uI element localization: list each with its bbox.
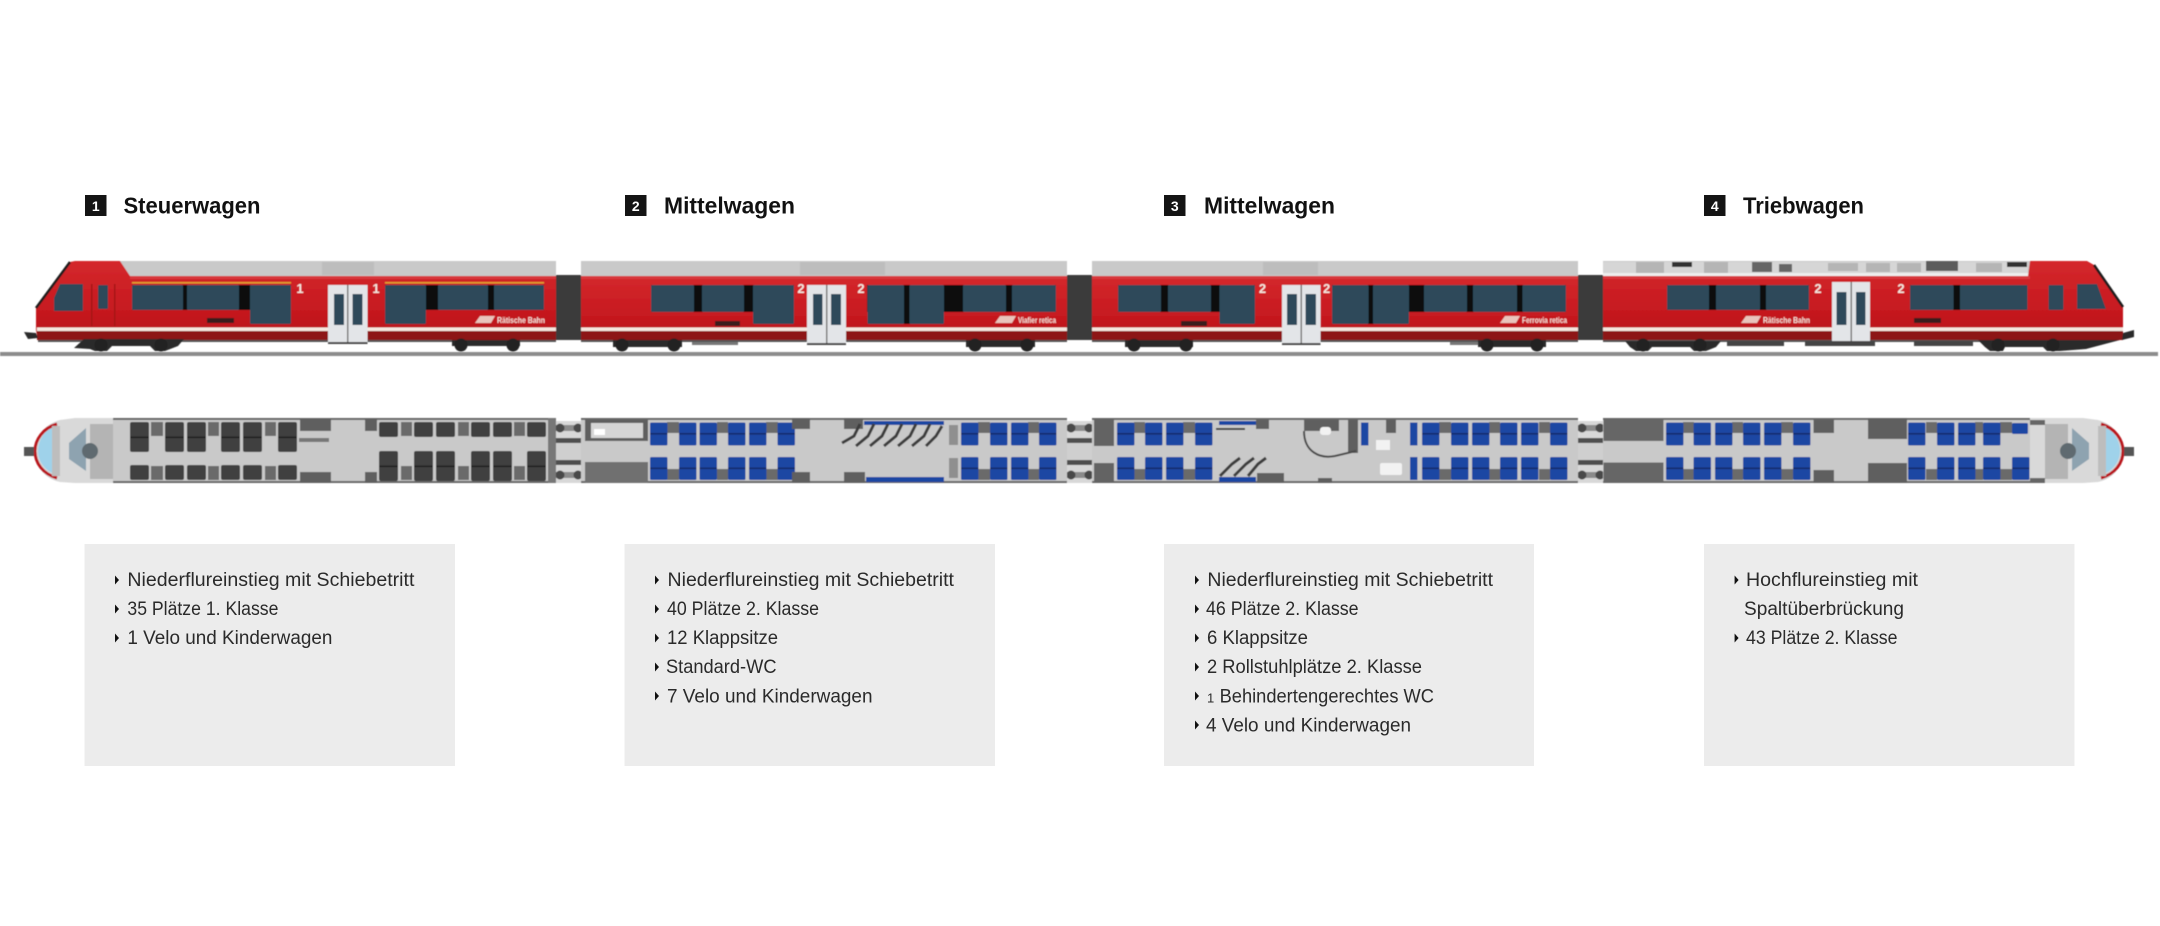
side view: Mittelwagen 2 — [581, 261, 1067, 352]
heading: wagon 1: Steuerwagen — [124, 192, 260, 218]
side view: Mittelwagen 2: 2 — [797, 281, 805, 296]
heading: wagon 1: 1 — [92, 198, 100, 214]
list item: Niederflureinstieg mit Schiebetritt — [127, 570, 415, 591]
list item: 43 Plätze 2. Klasse — [1746, 628, 1898, 649]
info panel: wagon 1 — [84, 544, 455, 766]
list item: 35 Plätze 1. Klasse — [127, 599, 278, 620]
side view: Mittelwagen 3: Ferrovia retica — [1522, 316, 1567, 325]
list item: 7 Velo und Kinderwagen — [667, 686, 872, 708]
side view: Steuerwagen: 1 — [296, 281, 304, 296]
train floor plan — [24, 418, 2134, 483]
info panel: wagon 4 — [1704, 544, 2074, 766]
plan: Mittelwagen 2 — [581, 418, 1067, 483]
list item: Spaltüberbrückung — [1744, 599, 1904, 620]
side view: Mittelwagen 3: 2 — [1323, 281, 1330, 296]
heading: wagon 4: Triebwagen — [1743, 192, 1864, 218]
list item: 1 Velo und Kinderwagen — [127, 628, 332, 649]
heading: wagon 3: 3 — [1171, 198, 1179, 214]
list item: Standard-WC — [666, 657, 776, 678]
plan: Triebwagen — [1603, 418, 2134, 483]
plan: Steuerwagen — [24, 418, 556, 483]
list item: 4 Velo und Kinderwagen — [1206, 716, 1411, 736]
list item: 1 — [1207, 690, 1214, 706]
side view: Steuerwagen: 1 — [372, 281, 380, 296]
side view: Mittelwagen 3 — [1092, 261, 1578, 352]
list item: 6 Klappsitze — [1207, 628, 1308, 649]
info panel: wagon 3 — [1164, 544, 1534, 766]
heading: wagon 4: 4 — [1711, 198, 1719, 214]
side view: Steuerwagen: Rätische Bahn — [497, 316, 545, 325]
list item: 2 Rollstuhlplätze 2. Klasse — [1207, 657, 1422, 678]
list item — [1735, 570, 1919, 620]
heading: wagon 2: 2 — [632, 198, 640, 214]
list item: Behindertengerechtes WC — [1220, 686, 1434, 708]
gangways between wagons — [556, 275, 1604, 340]
list item: 46 Plätze 2. Klasse — [1206, 599, 1359, 620]
side view: Triebwagen — [1603, 261, 2134, 352]
side view: Triebwagen: Rätische Bahn — [1763, 316, 1810, 325]
side view: Mittelwagen 3: 2 — [1259, 281, 1266, 296]
side view: Steuerwagen — [24, 261, 556, 352]
list item: 40 Plätze 2. Klasse — [667, 599, 819, 620]
side view: Triebwagen: 2 — [1897, 281, 1905, 296]
train side view — [0, 261, 2158, 356]
list item: 12 Klappsitze — [667, 628, 778, 649]
info panel: wagon 2 — [624, 544, 995, 766]
side view: Mittelwagen 2: 2 — [857, 281, 865, 296]
gangways in plan — [556, 421, 1604, 483]
rail — [0, 352, 2158, 356]
side view: Mittelwagen 2: Viafier retica — [1018, 316, 1056, 325]
list item: Niederflureinstieg mit Schiebetritt — [1207, 570, 1494, 591]
side view: Triebwagen: 2 — [1814, 281, 1822, 296]
heading: wagon 2: Mittelwagen — [664, 192, 795, 218]
list item: Niederflureinstieg mit Schiebetritt — [668, 570, 955, 591]
plan: Mittelwagen 3 — [1092, 418, 1578, 483]
heading: wagon 3: Mittelwagen — [1204, 192, 1335, 218]
list item: Hochflureinstieg mit — [1746, 570, 1919, 591]
